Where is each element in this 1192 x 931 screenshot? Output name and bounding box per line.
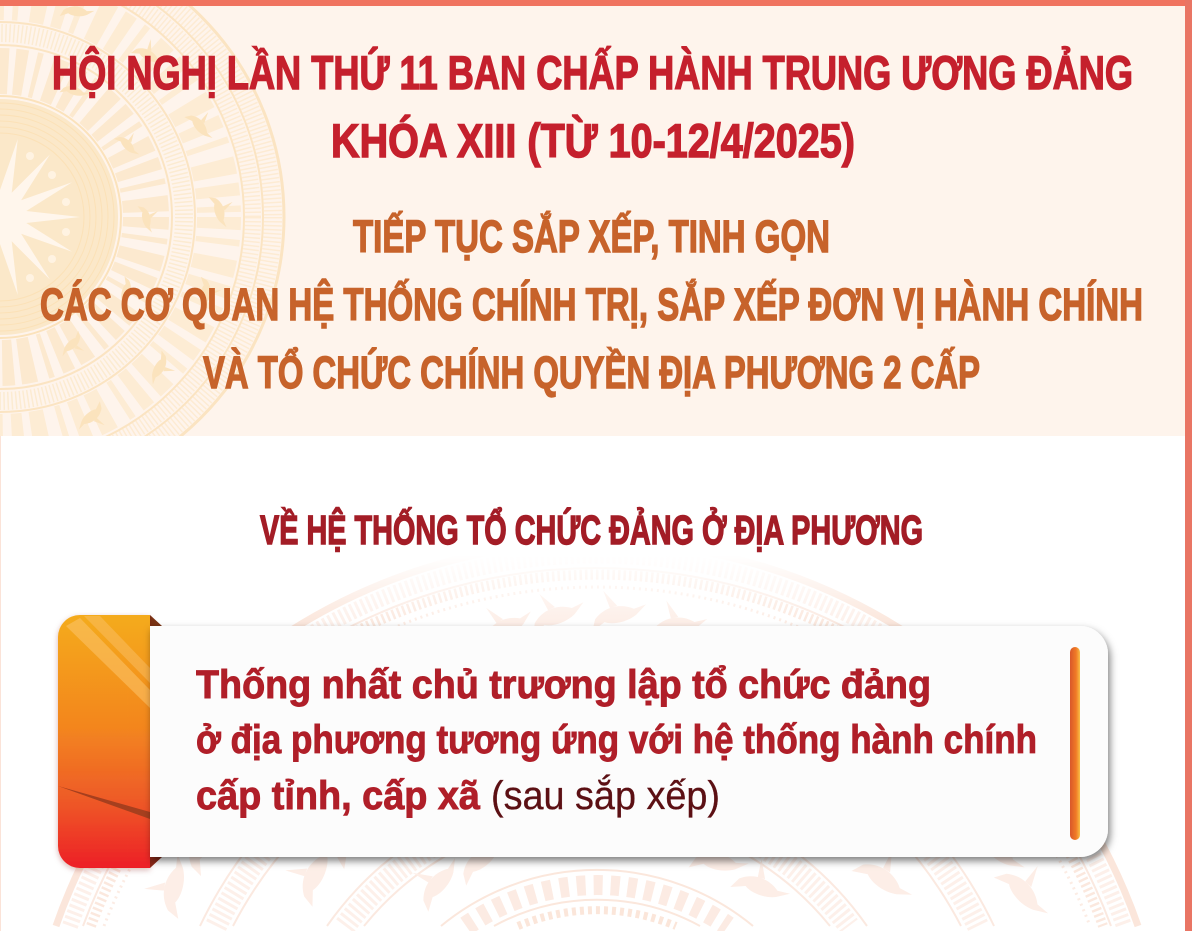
subtitle: TIẾP TỤC SẮP XẾP, TINH GỌN <box>353 211 830 262</box>
right border <box>1185 0 1192 931</box>
card text: cấp tỉnh, cấp xã <box>196 774 481 818</box>
accent bar <box>1070 647 1080 840</box>
card text: (sau sắp xếp) <box>491 773 720 818</box>
card body <box>150 626 1108 857</box>
card text: Thống nhất chủ trương lập tổ chức đảng <box>196 663 931 707</box>
subtitle <box>40 211 1143 398</box>
title: KHÓA XIII (TỪ 10-12/4/2025) <box>331 114 855 167</box>
card text <box>196 663 1037 818</box>
panel: header background with drum motif <box>0 6 1185 436</box>
title <box>52 46 1133 167</box>
icon: bronze drum motif in header <box>0 6 286 436</box>
section heading: VỀ HỆ THỐNG TỔ CHỨC ĐẢNG Ở ĐỊA PHƯƠNG <box>260 506 923 553</box>
background bronze drum motif, lower section <box>56 542 1138 928</box>
panel: callout card <box>58 615 1108 868</box>
top border <box>0 0 1192 6</box>
left border <box>0 436 1 931</box>
icon: folded ribbon tab <box>58 615 162 868</box>
card text: ở địa phương tương ứng với hệ thống hành chính <box>196 718 1037 762</box>
